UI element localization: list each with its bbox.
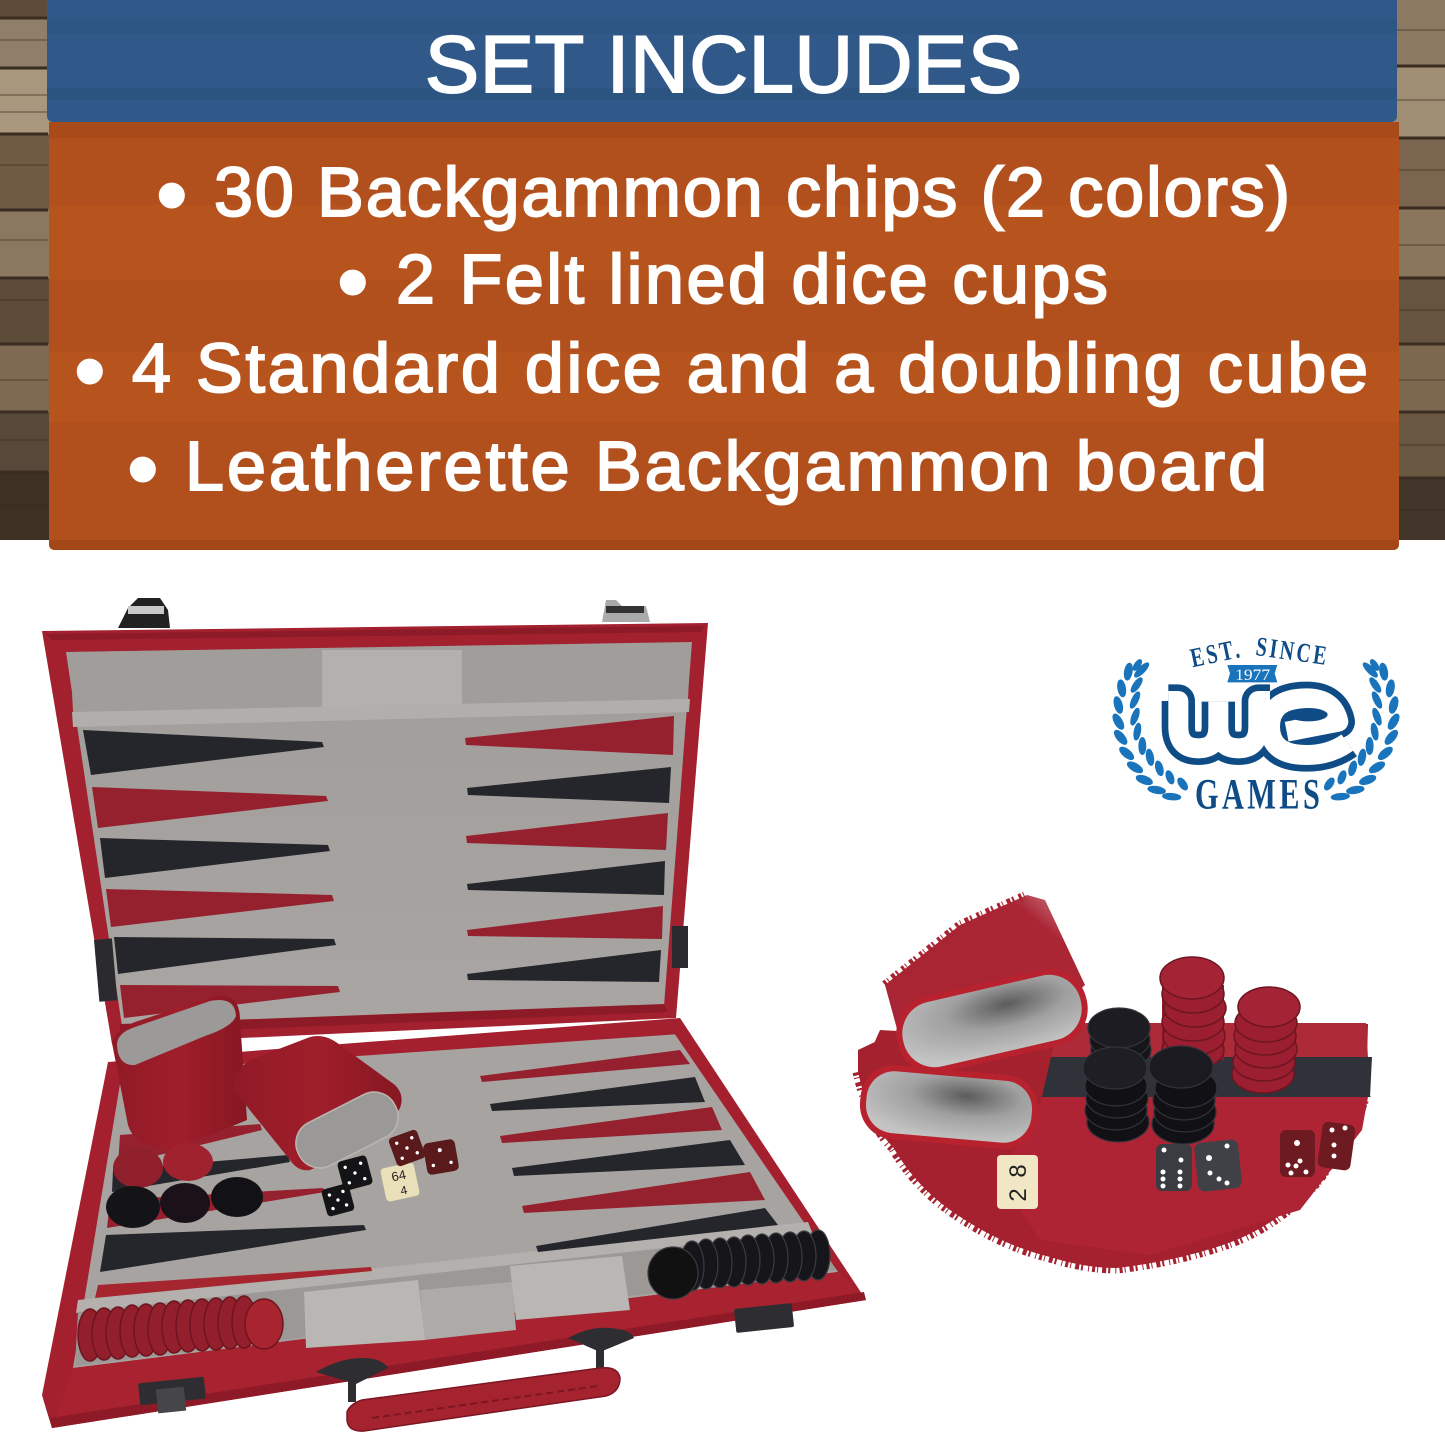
heading banner xyxy=(47,0,1397,122)
stacked black chips xyxy=(648,1230,830,1299)
lying dice cup xyxy=(232,1036,406,1176)
loose dice on board: 4 xyxy=(399,1183,409,1198)
lower tray xyxy=(42,1018,866,1428)
list item 2 xyxy=(336,228,1108,335)
stacked red chips xyxy=(78,1296,283,1361)
standing dice cup xyxy=(112,996,247,1148)
laurel left xyxy=(1111,659,1189,800)
black chip stack front right xyxy=(1149,1046,1217,1144)
red chip stack left xyxy=(1160,957,1226,1069)
inset leather background xyxy=(858,1023,1372,1268)
logo mark: WE xyxy=(1168,698,1347,755)
carrying handle xyxy=(347,1368,620,1431)
logo year badge xyxy=(1227,665,1277,684)
red chip stack right xyxy=(1232,987,1300,1093)
dice black xyxy=(1156,1139,1242,1192)
list item 1: 30 Backgammon chips (2 colors) xyxy=(214,153,1290,231)
black chip stack front left xyxy=(1083,1047,1149,1142)
list item 1 xyxy=(155,141,1290,248)
dice red xyxy=(1280,1121,1356,1177)
backgammon case xyxy=(42,598,866,1431)
background: wood planks xyxy=(0,0,1445,540)
logo text: games: GAMES xyxy=(1195,771,1320,819)
panel: contents list xyxy=(49,122,1399,550)
list item 3 xyxy=(73,317,1368,424)
logo text: est. since: EST. xyxy=(1188,635,1242,674)
doubling cube: 2 xyxy=(1005,1188,1032,1202)
latches and hinges xyxy=(138,1303,794,1413)
logo text: est. since xyxy=(1188,632,1328,674)
list item 3: • xyxy=(73,317,107,424)
lower dice cup xyxy=(857,1030,1055,1152)
doubling cube: 8 xyxy=(1005,1164,1032,1178)
logo: WE Games xyxy=(1111,632,1401,819)
black chip stack back xyxy=(1088,1008,1151,1069)
logo text: est. since: SINCE xyxy=(1254,632,1328,672)
title: SET INCLUDES xyxy=(425,20,1022,110)
list item 4: • xyxy=(126,415,160,522)
list item 2: 2 Felt lined dice cups xyxy=(396,240,1108,318)
upper board points xyxy=(83,716,674,1018)
lower board points xyxy=(95,1050,778,1298)
clasps on lid top xyxy=(118,598,650,628)
list item 2: • xyxy=(336,228,370,335)
laurel right xyxy=(1323,659,1401,800)
inset: close-up of accessories xyxy=(857,895,1372,1268)
logo year badge: 1977 xyxy=(1235,667,1270,684)
loose dice on board xyxy=(321,1129,460,1217)
loose dice on board: 64 xyxy=(390,1167,407,1184)
list item 3: 4 Standard dice and a doubling cube xyxy=(132,329,1368,407)
list item 4: Leatherette Backgammon board xyxy=(185,427,1267,505)
list item 4 xyxy=(126,415,1267,522)
upper dice cup xyxy=(885,895,1095,1081)
list item 1: • xyxy=(155,141,189,248)
loose chips on board xyxy=(106,1143,263,1228)
doubling cube xyxy=(997,1155,1038,1209)
upper lid xyxy=(42,623,708,1044)
